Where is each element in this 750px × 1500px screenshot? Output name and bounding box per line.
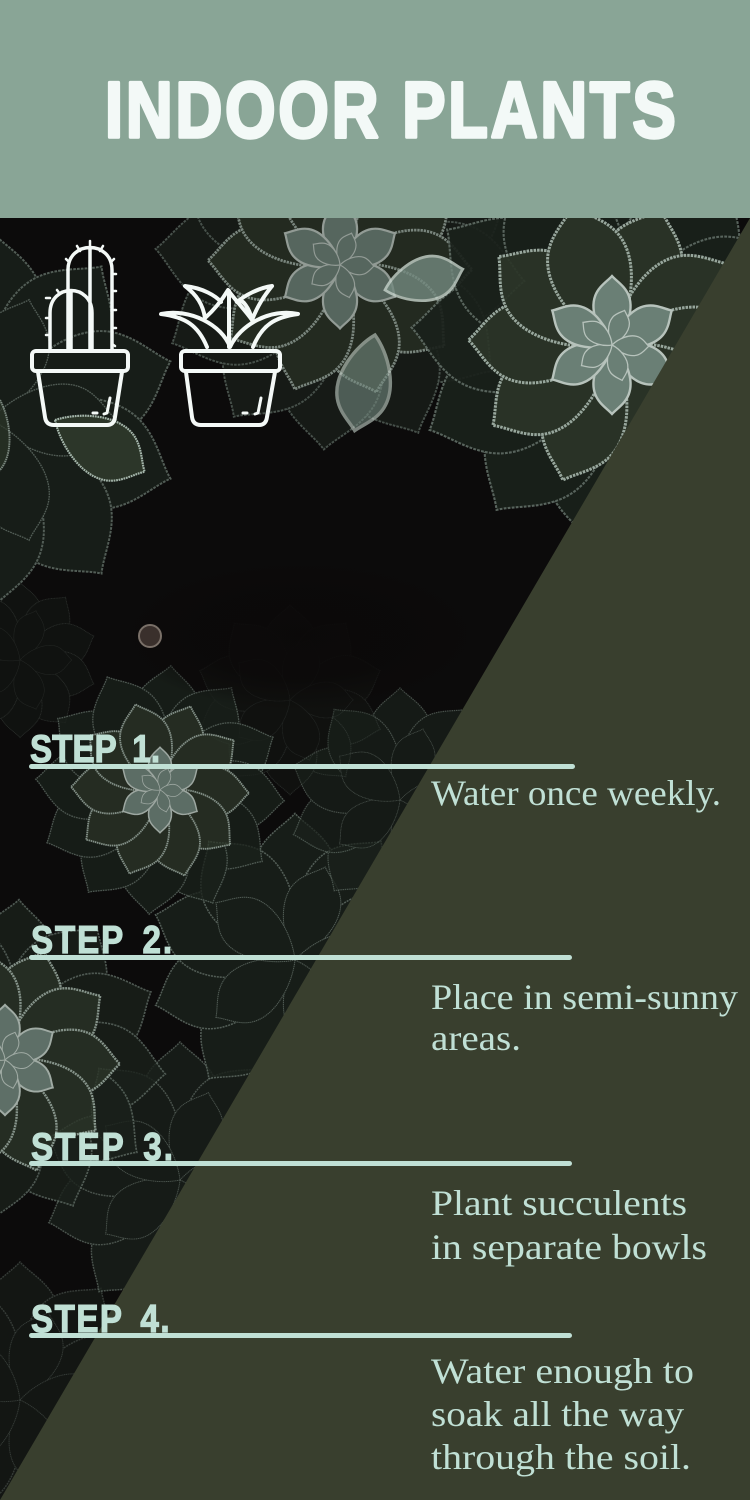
step 1 text: Water once weekly. — [431, 773, 721, 813]
step 2 text: areas. — [431, 1018, 521, 1058]
step 2 text — [431, 977, 738, 1058]
title: INDOOR PLANTS — [105, 67, 676, 154]
step 4 text — [431, 1351, 694, 1477]
step 3 text: in separate bowls — [431, 1227, 707, 1267]
step 1 heading: STEP 1. — [30, 726, 160, 771]
step 3 text — [431, 1183, 707, 1267]
step 4 heading — [29, 1296, 572, 1341]
icon: aloe in pot — [161, 286, 298, 425]
step 4 text: through the soil. — [431, 1437, 691, 1477]
step 2 heading — [29, 917, 572, 962]
step 3 heading: STEP 3. — [31, 1124, 173, 1169]
header band — [0, 0, 750, 218]
step 3 text: Plant succulents — [431, 1183, 687, 1223]
step 2 heading: STEP 2. — [31, 917, 172, 962]
icon: cactus in pot — [32, 241, 128, 425]
step 3 heading — [29, 1124, 572, 1169]
step 4 text: soak all the way — [431, 1394, 684, 1434]
step 1 heading — [29, 726, 575, 771]
step 4 text: Water enough to — [431, 1351, 694, 1391]
step 2 text: Place in semi-sunny — [431, 977, 738, 1017]
step 4 heading: STEP 4. — [31, 1296, 170, 1341]
